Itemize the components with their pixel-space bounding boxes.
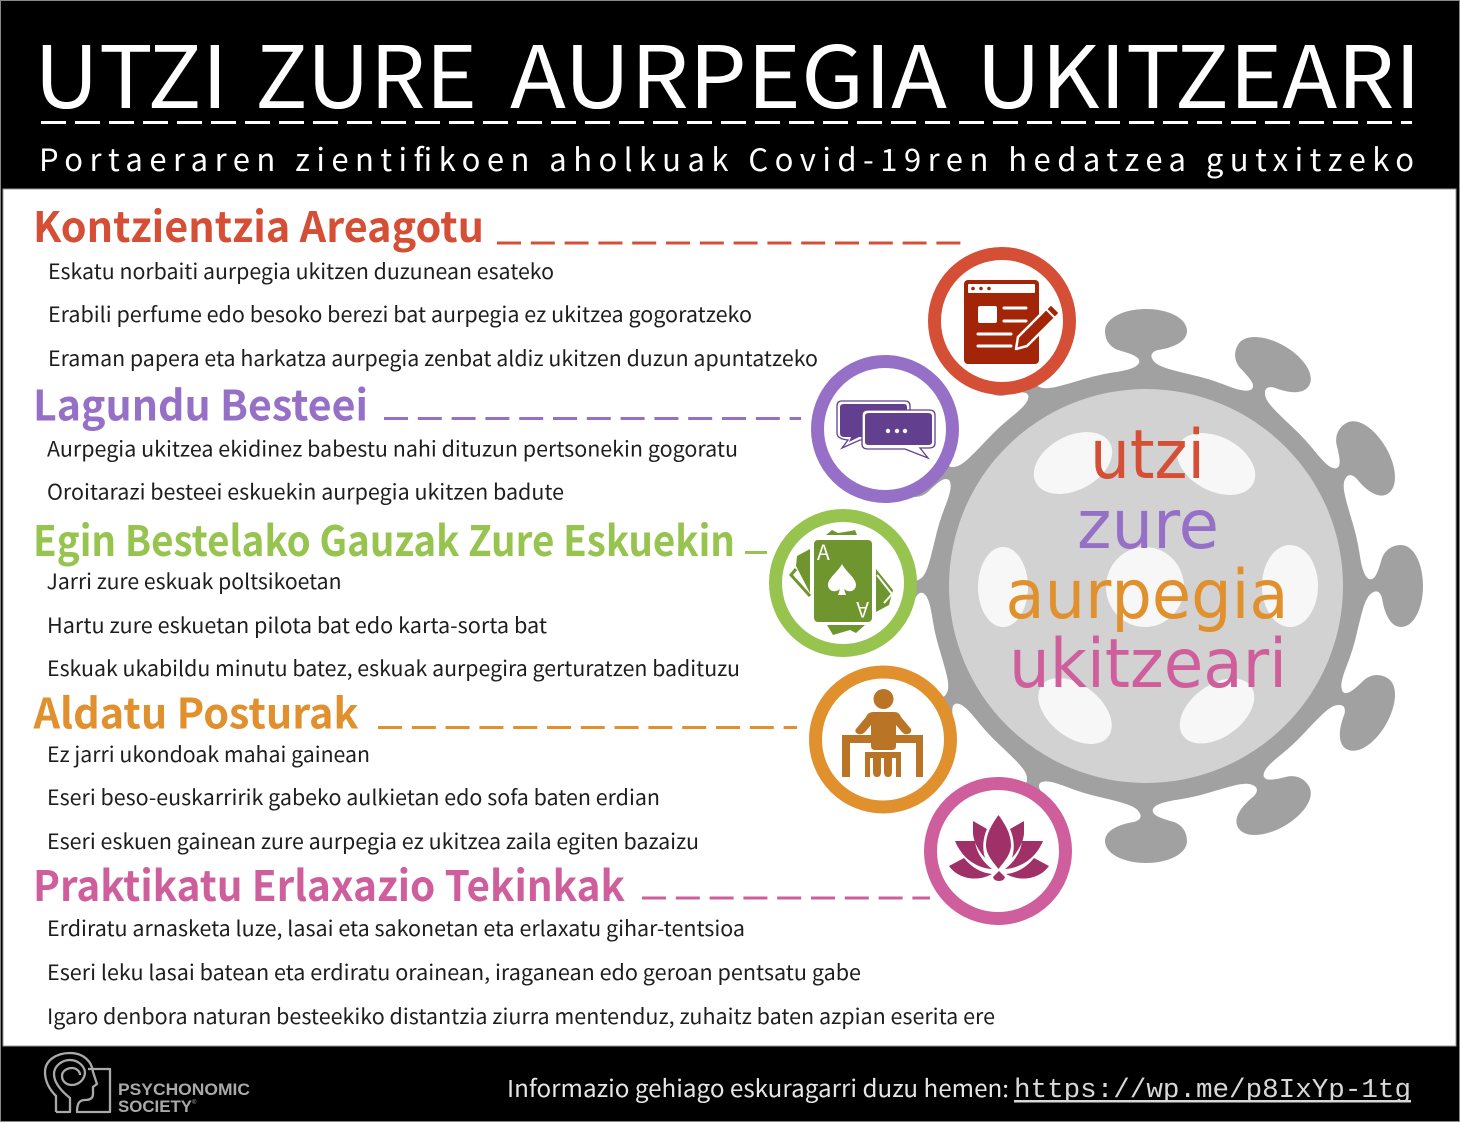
tip 2: Hartu zure eskuetan pilota bat edo karta-sorta bat: [47, 610, 547, 640]
tip 1: Erdiratu arnasketa luze, lasai eta sakonetan eta erlaxatu gihar-tentsioa: [47, 913, 745, 943]
icon: playing cards: [776, 516, 910, 650]
icon: notepad and pencil: [934, 254, 1070, 388]
header: [34, 8, 1421, 180]
tip 3: Eraman papera eta harkatza aurpegia zenbat aldiz ukitzen duzun apuntatzeko: [48, 343, 818, 373]
heading: Aldatu Posturak: [33, 680, 359, 742]
virus word: utzi: utzi: [1090, 416, 1205, 495]
registered mark: ®: [192, 1099, 197, 1106]
logo text: PSYCHONOMIC: [118, 1080, 250, 1099]
tip 2: Eseri beso-euskarririk gabeko aulkietan edo sofa baten erdian: [47, 782, 660, 812]
tip 2: Erabili perfume edo besoko berezi bat aurpegia ez ukitzea gogoratzeko: [48, 299, 752, 329]
more information text: Informazio gehiago eskuragarri duzu hemen:: [507, 1070, 1009, 1104]
logo: Psychonomic Society: [45, 1053, 250, 1116]
logo text: SOCIETY: [118, 1097, 193, 1116]
title: UTZI: [34, 8, 228, 133]
title: AURPEGIA: [510, 8, 947, 133]
section: Praktikatu Erlaxazio Tekinkak: [33, 853, 995, 1031]
tip 2: Oroitarazi besteei eskuekin aurpegia ukitzen badute: [47, 476, 564, 506]
section: Egin Bestelako Gauzak Zure Eskuekin: [33, 508, 767, 683]
virus illustration: [869, 309, 1423, 863]
tip 3: Igaro denbora naturan besteekiko distantzia ziurra mentenduz, zuhaitz baten azpian eserita ere: [47, 1001, 995, 1031]
icon: playing cards: A: [856, 595, 869, 625]
tip 1: Eskatu norbaiti aurpegia ukitzen duzunean esateko: [48, 256, 554, 286]
tip 3: Eseri eskuen gainean zure aurpegia ez ukitzea zaila egiten bazaizu: [47, 826, 699, 856]
title: ZURE: [255, 8, 477, 133]
heading: Lagundu Besteei: [33, 372, 368, 434]
tip 1: Aurpegia ukitzea ekidinez babestu nahi dituzun pertsonekin gogoratu: [47, 434, 738, 464]
icon: speech bubbles: [818, 362, 952, 496]
heading: Kontzientzia Areagotu: [33, 194, 484, 255]
section: Aldatu Posturak: [33, 680, 797, 856]
tip 2: Eseri leku lasai batean eta erdiratu orainean, iraganean edo geroan pentsatu gabe: [47, 957, 861, 987]
virus word: zure: zure: [1077, 486, 1219, 565]
title: [34, 8, 1421, 133]
subtitle: Portaeraren zientifikoen aholkuak Covid-19ren hedatzea gutxitzeko: [39, 135, 1414, 180]
heading: Praktikatu Erlaxazio Tekinkak: [33, 853, 626, 914]
tip 1: Jarri zure eskuak poltsikoetan: [46, 566, 342, 596]
icon: person at desk: [816, 672, 950, 807]
footer: [45, 1053, 1411, 1116]
title: UKITZEARI: [976, 8, 1421, 133]
white content panel: [3, 189, 1456, 1046]
heading: Egin Bestelako Gauzak Zure Eskuekin: [33, 508, 735, 569]
tip 3: Eskuak ukabildu minutu batez, eskuak aurpegira gerturatzen badituzu: [47, 653, 740, 683]
section: Lagundu Besteei: [33, 372, 801, 506]
virus word: ukitzeari: ukitzeari: [1009, 625, 1287, 704]
icon: playing cards: A: [817, 537, 830, 567]
virus word: aurpegia: aurpegia: [1006, 556, 1288, 635]
link: https://wp.me/p8IxYp-1tg: [1014, 1076, 1411, 1106]
icon: lotus flower: [930, 784, 1066, 918]
section: Kontzientzia Areagotu: [33, 194, 961, 373]
tip 1: Ez jarri ukondoak mahai gainean: [47, 739, 370, 769]
